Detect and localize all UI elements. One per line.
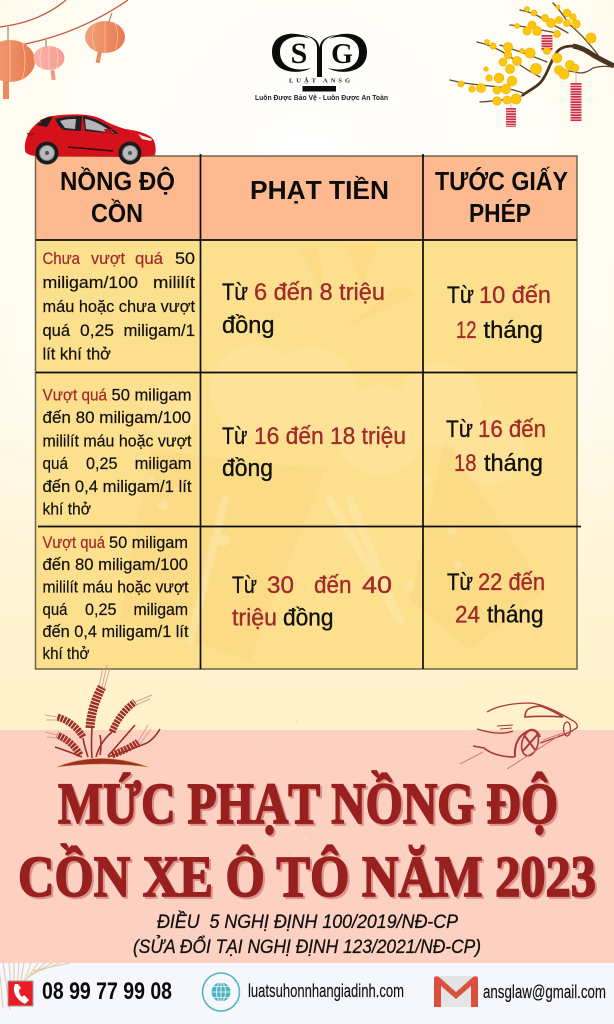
row 1: licence suspension: tháng (484, 317, 543, 344)
row 2: concentration: Vượt quá (42, 387, 108, 405)
row 3: concentration: 50 miligam (109, 534, 188, 552)
row 3: fine: đến (314, 572, 352, 599)
website: luatsuhonnhangiadinh.com (248, 980, 404, 1001)
row 1: licence suspension: 12 (456, 317, 476, 344)
row 3: licence suspension: tháng (487, 602, 544, 629)
decoration: sunburst rays (0, 963, 70, 1010)
header: Nồng độ cồn: NỒNG ĐỘ (60, 166, 175, 196)
row 3: fine: đồng (283, 604, 334, 632)
decoration: sparkles (199, 720, 341, 891)
row 1: concentration: 0,25 (80, 322, 114, 340)
icon: red car (25, 114, 156, 164)
firecrackers (511, 35, 576, 127)
row 2: concentration: quá (42, 455, 69, 473)
footer background (0, 963, 614, 1024)
row 2: concentration: khí thở (42, 501, 91, 519)
row 1: licence suspension (447, 282, 551, 344)
row 3: fine: 30 (267, 572, 294, 599)
row 3: concentration: miligam (134, 601, 188, 619)
row 2: concentration: đến 80 miligam/100 (42, 409, 191, 427)
header: Tước giấy phép (435, 166, 568, 228)
row 1: licence suspension: 10 đến (479, 282, 551, 309)
row 2: fine: 16 đến 18 triệu (254, 423, 406, 450)
row 3: concentration: Vượt quá (42, 534, 106, 552)
row 3: concentration (42, 534, 189, 663)
header: Phạt tiền: PHẠT TIỀN (250, 175, 389, 205)
logo mark (272, 34, 367, 77)
row 1: fine (222, 279, 385, 339)
row 3: licence suspension: 24 (455, 602, 480, 629)
row 1: concentration: quá (135, 250, 164, 268)
row 3: fine: triệu (232, 604, 277, 632)
row 1: concentration: Chưa (42, 250, 81, 268)
row 1: concentration: mililít (153, 274, 195, 292)
row 2: concentration: 50 miligam (112, 387, 192, 405)
logo (255, 34, 388, 102)
table grid (36, 154, 581, 669)
table (35, 154, 581, 669)
row 2: licence suspension: 18 (454, 450, 476, 477)
row 1: concentration: lít khí thở (42, 346, 111, 364)
title (18, 771, 598, 911)
row 3: fine: 40 (362, 572, 392, 599)
table header fill (35, 156, 577, 240)
row 1: fine: 6 đến 8 triệu (254, 279, 385, 306)
row 2: concentration (42, 387, 192, 519)
legal reference subtitle (133, 911, 481, 958)
ground (57, 758, 148, 767)
row 1: fine: Từ (222, 279, 248, 306)
icon: globe (202, 973, 240, 1011)
page background (0, 0, 614, 730)
icon: gmail (434, 976, 478, 1007)
phone number: 08 99 77 99 08 (42, 978, 172, 1005)
row 3: fine: Từ (232, 572, 257, 599)
logo name: LUẬT ANSG (289, 76, 350, 84)
header: Tước giấy phép: TƯỚC GIẤY (435, 166, 568, 196)
row 1: concentration: miligam/100 (42, 274, 138, 292)
band: title background (0, 730, 614, 963)
row 2: fine (222, 423, 406, 482)
row 1: concentration: miligam/1 (124, 322, 195, 340)
row 2: licence suspension: Từ (446, 416, 473, 443)
row 1: licence suspension: Từ (447, 282, 474, 309)
row 3: concentration: quá (42, 601, 68, 619)
row 2: concentration: mililít máu hoặc vượt (42, 433, 192, 451)
table body fill (35, 240, 577, 669)
row 2: concentration: 0,25 (86, 455, 118, 473)
watermark: beer mugs (120, 245, 545, 660)
logo bar (302, 86, 336, 92)
row 2: licence suspension: 16 đến (478, 416, 546, 443)
row 2: fine: Từ (222, 423, 248, 450)
header: Nồng độ cồn (60, 166, 175, 228)
row 3: concentration: đến 80 miligam/100 (42, 556, 188, 574)
row 3: concentration: 0,25 (85, 601, 116, 619)
header: Nồng độ cồn: CỒN (91, 198, 143, 228)
icon: sketched car (460, 703, 577, 769)
row 2: licence suspension (446, 416, 546, 477)
legal reference subtitle: (SỬA ĐỔI TẠI NGHỊ ĐỊNH 123/2021/NĐ-CP) (133, 936, 481, 958)
row 2: fine: đồng (222, 455, 273, 482)
row 1: concentration (42, 250, 195, 364)
row 1: concentration: máu hoặc chưa vượt (42, 298, 195, 316)
row 3: concentration: khí thở (42, 645, 90, 663)
row 2: concentration: miligam (135, 455, 192, 473)
legal reference subtitle: ĐIỀU 5 NGHỊ ĐỊNH 100/2019/NĐ-CP (157, 911, 458, 933)
logo mark: G (331, 39, 353, 70)
logo mark: S (291, 37, 307, 70)
row 3: concentration: đến 0,4 miligam/1 lít (42, 623, 189, 641)
icon: phone (8, 981, 33, 1006)
row 3: licence suspension: 22 đến (478, 569, 545, 596)
row 2: licence suspension: tháng (484, 450, 543, 477)
row 1: concentration: vượt (91, 250, 125, 268)
row 1: concentration: 50 (175, 250, 195, 268)
decoration: apricot blossom branch (450, 3, 614, 127)
icon: wheat (45, 665, 160, 767)
row 3: licence suspension: Từ (447, 569, 473, 596)
row 3: fine (232, 572, 392, 632)
row 2: concentration: đến 0,4 miligam/1 lít (42, 478, 192, 496)
row 1: fine: đồng (222, 312, 274, 339)
header: Tước giấy phép: PHÉP (469, 198, 531, 228)
logo tagline: Luôn Được Bảo Vệ - Luôn Được An Toàn (255, 93, 388, 102)
row 3: licence suspension (447, 569, 545, 629)
row 1: concentration: quá (42, 322, 71, 340)
row 3: concentration: mililít máu hoặc vượt (42, 579, 189, 597)
decoration: hanging lanterns (0, 0, 128, 99)
